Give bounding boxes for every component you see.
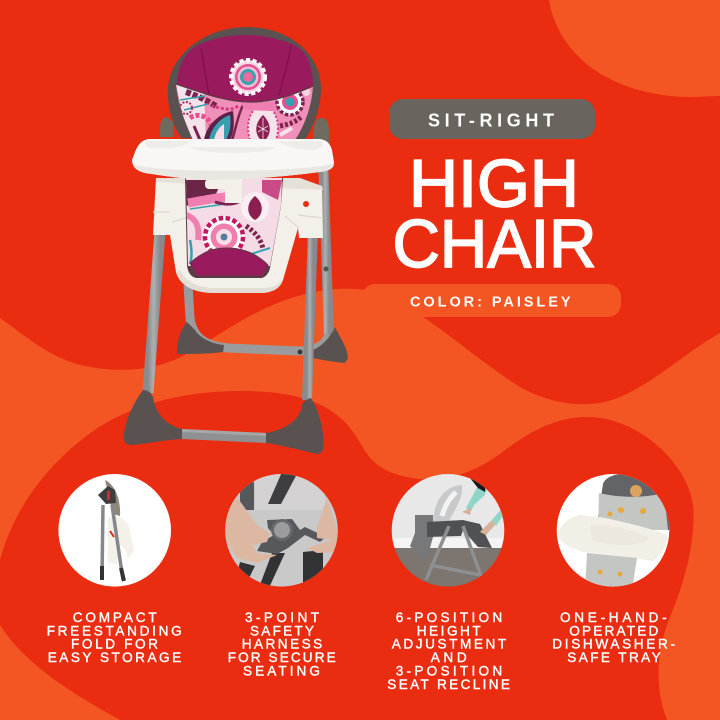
rear feet (177, 322, 348, 363)
front feet (124, 390, 323, 454)
seat paisley fabric (185, 178, 285, 268)
orange wave band (0, 289, 720, 720)
feature 2: circle photo of harness buckle (225, 472, 338, 590)
seat pad (185, 178, 285, 278)
front legs (148, 230, 328, 400)
caption 4: DISHWASHER- (552, 637, 675, 652)
seat shell (153, 178, 323, 293)
front crossbar (182, 429, 266, 443)
caption 1: FREESTANDING (47, 623, 182, 638)
caption 2: SEATING (243, 664, 320, 678)
feature 4: circle photo of removable tray (557, 473, 670, 590)
heading line 1: HIGH (409, 147, 579, 221)
caption 4: OPERATED (569, 623, 658, 638)
caption 2: FOR SECURE (228, 650, 336, 665)
colour pill (362, 284, 621, 317)
caption 3: 3-POSITION (396, 664, 502, 678)
caption 1: EASY STORAGE (48, 650, 181, 665)
caption 3: HEIGHT (417, 623, 481, 638)
brand label text: SIT-RIGHT (428, 110, 554, 130)
caption 3: AND (431, 650, 467, 665)
caption 2: HARNESS (242, 637, 322, 652)
caption 3 (387, 610, 510, 692)
backrest (168, 27, 321, 151)
tray (132, 139, 334, 180)
caption 3: 6-POSITION (396, 610, 502, 625)
title block (362, 99, 621, 317)
caption 1: FOLD FOR (71, 637, 158, 652)
caption 4: SAFE TRAY (567, 650, 661, 665)
caption 4: ONE-HAND- (560, 610, 667, 625)
heading line 2: CHAIR (392, 207, 596, 282)
feature 3: circle photo of height adjustment (391, 474, 505, 588)
caption 2: SAFETY (250, 623, 314, 638)
caption 2: 3-POINT (245, 610, 319, 625)
caption 3: SEAT RECLINE (387, 677, 510, 692)
backrest flower medallion (231, 60, 265, 94)
harness post and logo tab (205, 178, 242, 203)
top right orange shape (549, 0, 720, 97)
caption 1: COMPACT (73, 610, 157, 625)
caption 1 (47, 610, 182, 665)
upper paisley fabric (176, 84, 313, 139)
feature 1: circle photo of folded chair (58, 474, 171, 587)
brand label pill (389, 99, 595, 139)
caption 4 (552, 610, 675, 665)
caption 3: ADJUSTMENT (392, 637, 506, 652)
rear legs (160, 117, 329, 351)
product image: high chair (124, 27, 348, 454)
colour text: COLOR: PAISLEY (410, 294, 571, 310)
caption 2 (228, 610, 336, 678)
